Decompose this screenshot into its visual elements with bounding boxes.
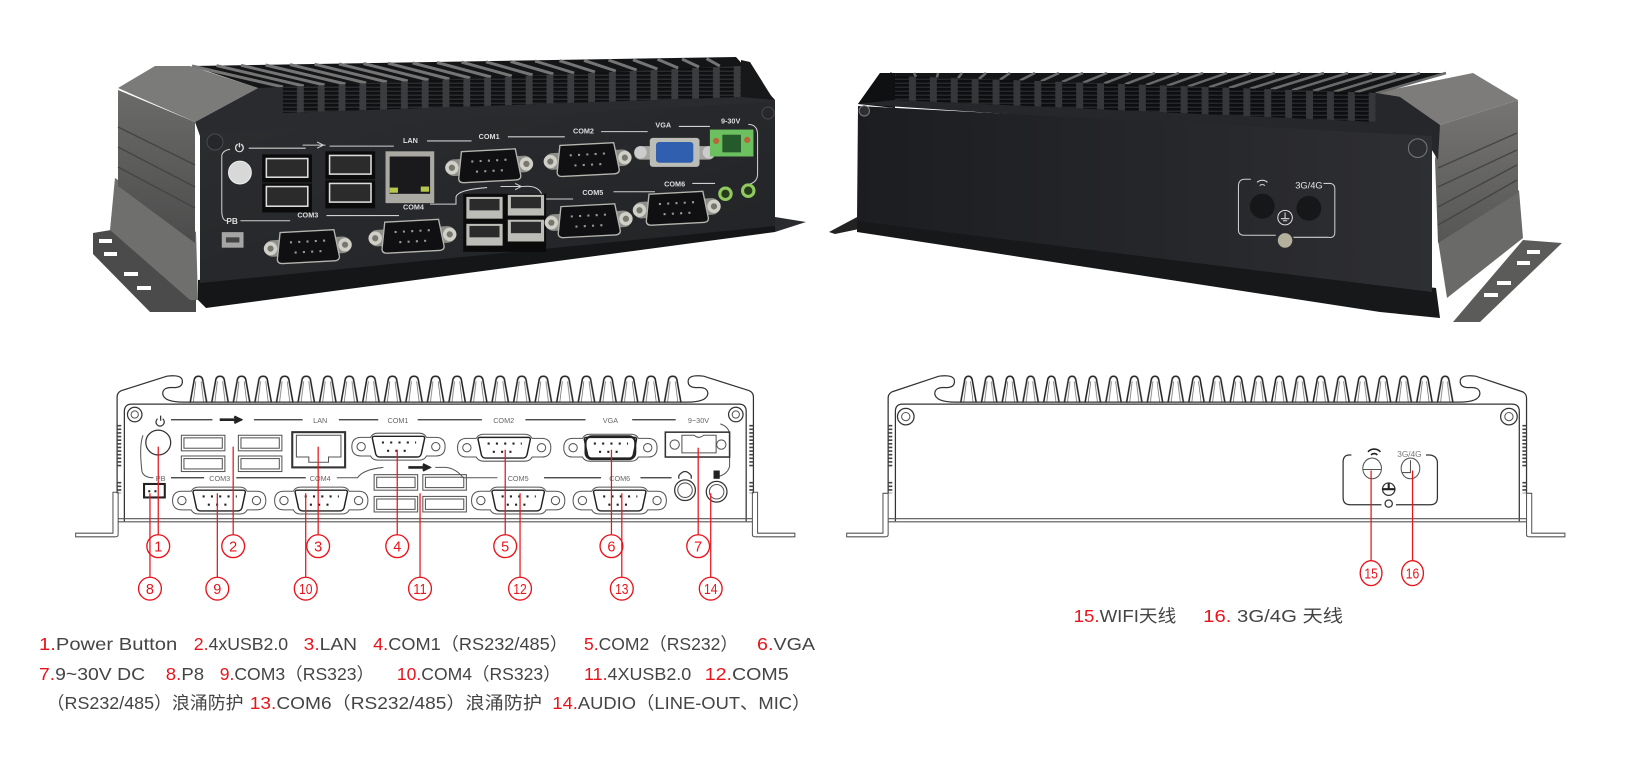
- printed panel labels: COM5: [582, 188, 603, 197]
- legend row 2: 10.COM4（RS323）: [397, 664, 561, 684]
- PB connector: [144, 484, 165, 497]
- leader lines: [1371, 471, 1413, 561]
- power terminal: [665, 432, 730, 457]
- callouts for rear panel: [1360, 471, 1423, 586]
- legend row 1: 5.COM2（RS232）: [584, 634, 738, 654]
- printed panel labels: PB: [226, 216, 238, 226]
- case outline: [847, 375, 1565, 537]
- shadow strip under panel: [857, 218, 1440, 318]
- legend row 1: 6.VGA: [757, 634, 815, 654]
- line drawing: rear panel: [847, 375, 1565, 537]
- printed labels: COM6: [609, 474, 630, 483]
- legend row 1: 1.Power Button: [39, 634, 177, 654]
- callout 9: [206, 577, 229, 600]
- audio jacks: [718, 183, 755, 201]
- printed panel labels: COM6: [664, 180, 685, 189]
- side panel: [1435, 100, 1518, 243]
- legend row 3: （RS232/485）浪涌防护: [47, 693, 244, 713]
- right case corner band: [858, 93, 1440, 160]
- legend row 1: 3.LAN: [304, 634, 357, 654]
- heat sink fin bases: [858, 73, 1446, 125]
- legend: rear panel ports: 15.WIFI天线: [1074, 606, 1176, 626]
- lit top facet of case: [118, 66, 258, 122]
- photo: rear of computer with antenna ports: [829, 73, 1562, 322]
- legend row 1: 2.4xUSB2.0: [194, 634, 288, 654]
- audio jacks: [675, 471, 727, 502]
- right case corner: [741, 60, 775, 110]
- printed labels: COM4: [310, 474, 331, 483]
- printed labels: [141, 416, 730, 483]
- serial connectors: [173, 433, 666, 514]
- callout 2: 2: [229, 539, 237, 555]
- antenna port frame and labels: [1343, 449, 1437, 507]
- power button: [229, 161, 251, 184]
- antenna port group: 3G/4G: [1295, 181, 1323, 191]
- left foot: [829, 216, 859, 234]
- legend row 1: [39, 634, 815, 654]
- printed labels: COM3: [209, 474, 230, 483]
- heat sink fin columns: [895, 76, 1376, 122]
- printed labels: LAN: [313, 416, 327, 425]
- printed panel labels: VGA: [655, 120, 672, 129]
- callout 4: [386, 535, 409, 558]
- heat sink fin tops: [192, 59, 720, 87]
- dark front band below fins: [195, 87, 775, 136]
- printed panel labels: 9-30V: [721, 116, 740, 125]
- LAN port: [386, 151, 434, 203]
- printed labels: 9~30V: [688, 416, 709, 425]
- right bracket upright: [1438, 190, 1523, 298]
- legend: rear panel ports: [1074, 606, 1343, 626]
- callout 13: 13: [615, 582, 629, 598]
- legend row 2: 12.COM5: [705, 664, 789, 684]
- callout 5: [494, 535, 517, 558]
- legend row 1: 4.COM1（RS232/485）: [373, 634, 568, 654]
- callout 12: 12: [513, 582, 527, 598]
- printed panel labels: [222, 116, 758, 226]
- printed labels: PB: [156, 474, 166, 483]
- callout 10: 10: [299, 582, 312, 598]
- serial connectors: [263, 142, 722, 264]
- callout 14: 14: [704, 582, 717, 598]
- line drawing: front panel: [76, 375, 795, 537]
- case outline: [76, 375, 795, 537]
- VGA connector: [634, 138, 715, 167]
- callout 8: [139, 577, 161, 600]
- power button: [146, 430, 171, 455]
- callout 11: 11: [413, 582, 427, 598]
- printed labels: COM2: [493, 416, 514, 425]
- legend: rear panel ports: 16. 3G/4G 天线: [1203, 606, 1343, 626]
- callout 15: 15: [1364, 566, 1378, 582]
- legend row 2: 9.COM3（RS323）: [220, 664, 374, 684]
- callout 16: 16: [1406, 566, 1419, 582]
- callout 7: 7: [694, 539, 702, 555]
- PB connector: [222, 232, 244, 248]
- leader lines: [150, 447, 711, 577]
- legend row 3: 14.AUDIO（LINE-OUT、MIC）: [552, 693, 810, 713]
- heat sink fin columns: [283, 66, 741, 113]
- callout 1: 1: [154, 539, 162, 555]
- callout 13: [610, 577, 633, 600]
- callout 11: [409, 577, 431, 600]
- right mounting foot: [1453, 240, 1562, 322]
- left mounting foot: [93, 230, 196, 312]
- callout 3: [307, 535, 330, 558]
- printed labels: COM1: [387, 416, 408, 425]
- front panel: [200, 102, 775, 283]
- USB ports: [181, 435, 466, 512]
- printed panel labels: LAN: [403, 136, 418, 145]
- callout 6: [600, 535, 623, 558]
- lower half: drawings and legends (scaled group): [39, 375, 1565, 713]
- heat sink fin bases: [192, 57, 775, 116]
- legend row 2: 8.P8: [166, 664, 204, 684]
- photo: front of computer with I/O ports: [93, 57, 806, 312]
- callout 12: [509, 577, 531, 600]
- callout 6: 6: [607, 539, 615, 555]
- callouts for front panel: [139, 447, 722, 600]
- side panel: [118, 90, 195, 243]
- right mounting foot: [775, 217, 806, 232]
- callout 5: 5: [501, 539, 509, 555]
- antenna port frame and labels: 3G/4G: [1397, 449, 1422, 459]
- antenna port group: [1238, 179, 1335, 248]
- printed panel labels: ⏻: [235, 141, 244, 154]
- callout 3: 3: [314, 539, 322, 555]
- lit top facet of case: [1375, 73, 1518, 125]
- printed panel labels: COM1: [479, 132, 500, 141]
- callout 9: 9: [213, 582, 221, 598]
- panel screws: [207, 107, 774, 150]
- callout 2: [222, 535, 245, 558]
- callout 10: [294, 577, 317, 600]
- callout 8: 8: [146, 582, 154, 598]
- rear panel: [857, 106, 1432, 292]
- legend row 2: [39, 664, 789, 684]
- printed labels: VGA: [603, 416, 618, 425]
- callout 1: [147, 535, 170, 558]
- LAN port: [292, 432, 345, 467]
- green power terminal: [710, 130, 753, 156]
- legend row 3: 13.COM6（RS232/485）浪涌防护: [250, 693, 542, 713]
- left bracket upright: [110, 178, 198, 300]
- callout 7: [687, 535, 710, 558]
- port details (scaled group): [859, 106, 1427, 248]
- printed panel labels: COM4: [403, 202, 424, 211]
- heat sink fin tops: [890, 73, 1446, 93]
- port details (scaled group): [222, 116, 758, 264]
- legend row 2: 11.4XUSB2.0: [584, 664, 691, 684]
- VGA connector: [564, 434, 657, 461]
- printed labels: COM5: [508, 474, 529, 483]
- USB ports: [262, 151, 546, 252]
- printed panel labels: COM3: [297, 211, 318, 220]
- shadow strip under panel: [198, 222, 775, 308]
- legend: front panel ports: [39, 634, 815, 713]
- callout 14: [699, 577, 722, 600]
- legend row 3: [47, 693, 810, 713]
- panel screws: [859, 106, 1427, 158]
- printed panel labels: COM2: [573, 127, 594, 136]
- legend row 2: 7.9~30V DC: [39, 664, 145, 684]
- callout 4: 4: [393, 539, 401, 555]
- left case corner: [858, 73, 895, 108]
